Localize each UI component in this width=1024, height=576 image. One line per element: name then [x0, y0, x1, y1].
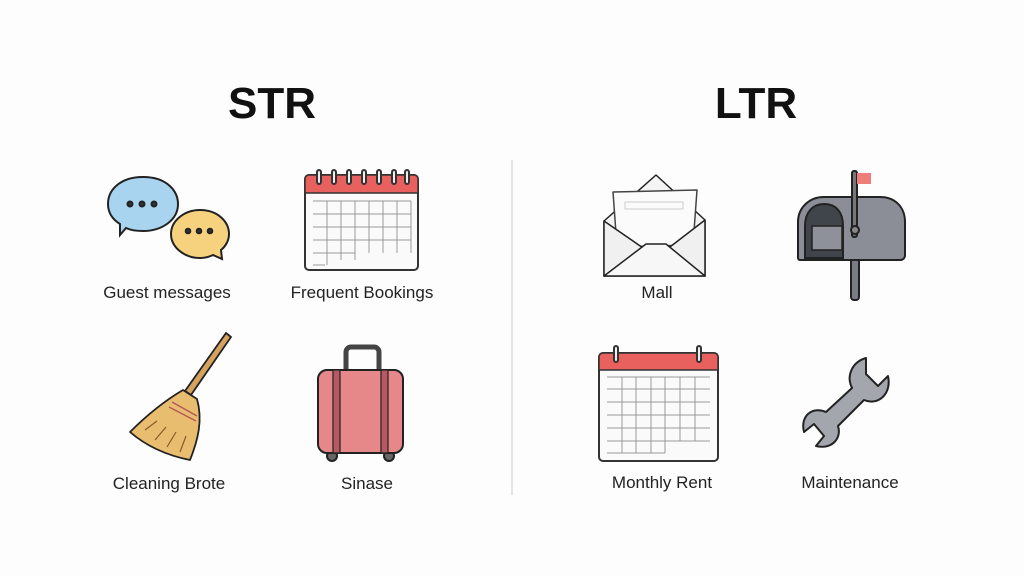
- icon: calendar monthly rent: [599, 346, 718, 461]
- title: STR: STR: [228, 79, 316, 128]
- label: Monthly Rent: Monthly Rent: [612, 473, 712, 492]
- label: Sinase: Sinase: [341, 474, 393, 493]
- label: Cleaning Brote: Cleaning Brote: [113, 474, 225, 493]
- icon: suitcase: [318, 347, 403, 461]
- title: LTR: LTR: [715, 79, 797, 128]
- label: Mall: Mall: [641, 283, 673, 302]
- label: Frequent Bookings: Frequent Bookings: [291, 283, 433, 302]
- icon: chat bubbles: [108, 177, 229, 259]
- label: Maintenance: Maintenance: [801, 473, 899, 492]
- icon: wrench: [803, 358, 889, 447]
- icon: mailbox: [798, 171, 905, 300]
- icon: envelope: [604, 175, 705, 276]
- icon: calendar frequent bookings: [305, 170, 418, 270]
- label: Guest messages: Guest messages: [103, 283, 231, 302]
- icon: broom: [130, 333, 231, 460]
